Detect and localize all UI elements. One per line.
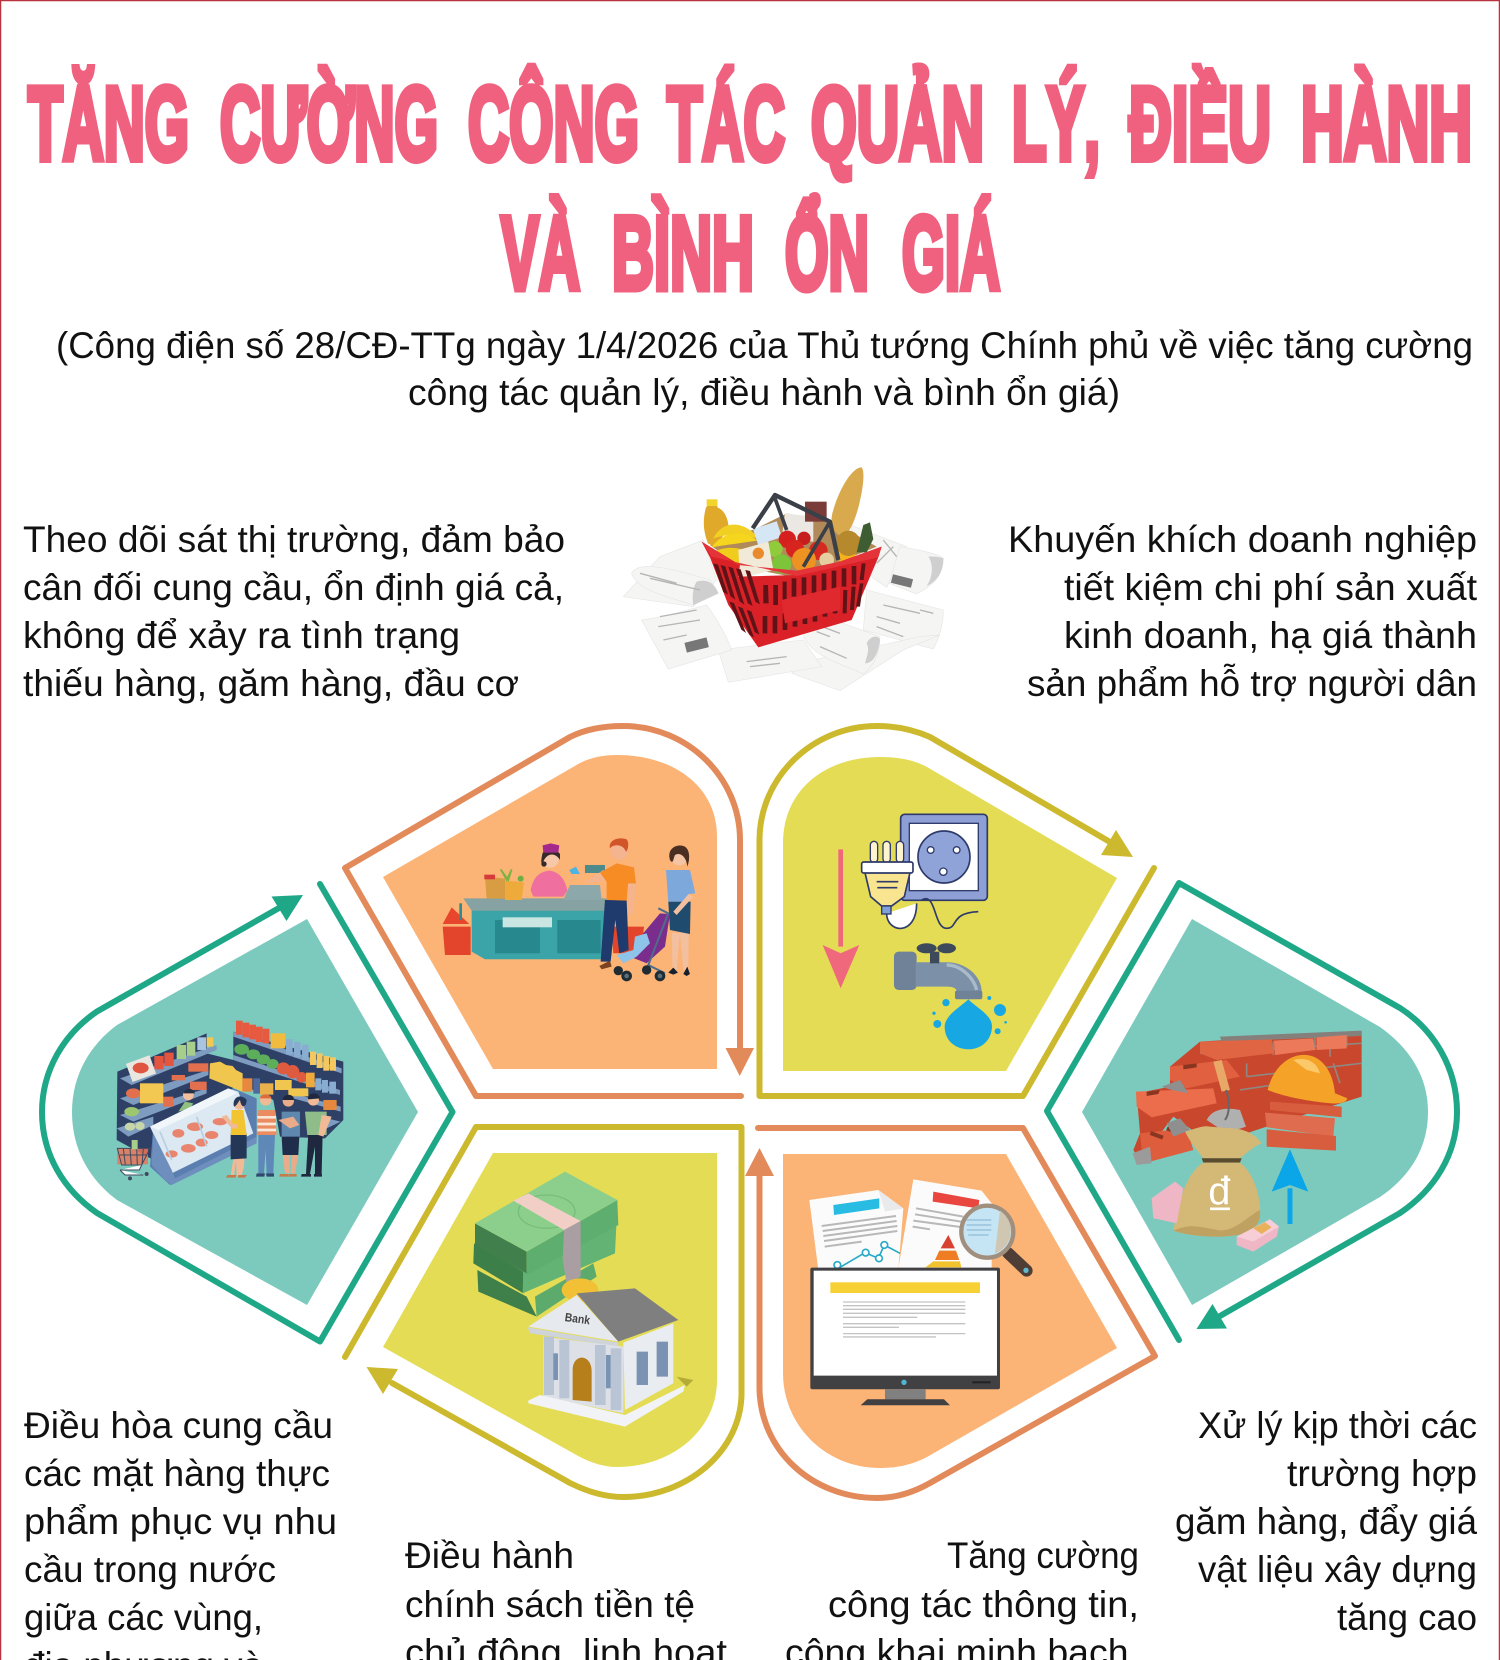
text block: bottom far right: Xử lý kịp thời các bbox=[1198, 1405, 1477, 1446]
text block: bottom far left bbox=[24, 1405, 337, 1660]
text block: bottom far right: vật liệu xây dựng bbox=[1198, 1549, 1477, 1590]
text block: top left: không để xảy ra tình trạng bbox=[23, 615, 460, 656]
arrow: right outline bbox=[1047, 883, 1457, 1340]
title: ĐIỀU bbox=[1129, 66, 1271, 182]
arrow: top-right outline bbox=[760, 726, 1154, 1096]
text block: bottom middle right bbox=[785, 1535, 1139, 1660]
panel: top-left orange bbox=[345, 726, 754, 1096]
shopping cart bbox=[117, 1140, 150, 1180]
text block: top left: thiếu hàng, găm hàng, đầu cơ bbox=[23, 663, 519, 704]
text block: bottom far left: các mặt hàng thực bbox=[24, 1453, 330, 1494]
money bag bbox=[1185, 1126, 1262, 1158]
text block: top right bbox=[1008, 519, 1478, 704]
subtitle: công tác quản lý, điều hành và bình ổn giá) bbox=[408, 372, 1120, 413]
panel: left teal bbox=[42, 884, 452, 1342]
illustration: socket, tap and down arrow bbox=[823, 814, 1007, 1049]
illustration: supermarket bbox=[117, 1021, 343, 1185]
deli counter bbox=[150, 1088, 257, 1185]
text block: top right: sản phẩm hỗ trợ người dân bbox=[1027, 663, 1477, 704]
title: TÁC bbox=[667, 66, 785, 182]
text block: bottom far right: tăng cao bbox=[1337, 1597, 1477, 1638]
panel: top-right yellow bbox=[760, 726, 1154, 1096]
title bbox=[28, 66, 1472, 312]
text block: bottom far left: phẩm phục vụ nhu bbox=[24, 1501, 337, 1542]
text block: top right: kinh doanh, hạ giá thành bbox=[1064, 615, 1477, 656]
text block: bottom middle right: công tác thông tin, bbox=[828, 1584, 1139, 1625]
arrow: left outline bbox=[42, 884, 452, 1342]
subtitle: (Công điện số 28/CĐ-TTg ngày 1/4/2026 của Thủ tướng Chính phủ về việc tăng cường bbox=[56, 325, 1473, 366]
text block: bottom middle left: Điều hành bbox=[405, 1535, 574, 1576]
text block: bottom far left: Điều hòa cung cầu bbox=[24, 1405, 333, 1446]
text block: top left: Theo dõi sát thị trường, đảm bảo bbox=[23, 519, 565, 560]
title: LÝ, bbox=[1012, 66, 1100, 182]
text block: top right: tiết kiệm chi phí sản xuất bbox=[1064, 567, 1478, 608]
text block: bottom far right: trường hợp bbox=[1287, 1453, 1477, 1494]
panel: bottom-right orange bbox=[745, 1128, 1155, 1498]
title: CÔNG bbox=[468, 66, 639, 182]
text block: bottom middle right: Tăng cường bbox=[947, 1535, 1139, 1576]
text block: bottom far right bbox=[1175, 1405, 1477, 1638]
panel: bottom-left yellow bbox=[345, 1127, 742, 1497]
text block: top left: cân đối cung cầu, ổn định giá cả, bbox=[23, 567, 564, 608]
basket body bbox=[702, 542, 882, 647]
panel: right teal bbox=[1047, 883, 1457, 1340]
title: TĂNG bbox=[28, 66, 189, 182]
text block: bottom far left: giữa các vùng, bbox=[24, 1597, 263, 1638]
arrow: bottom-left outline bbox=[345, 1127, 742, 1497]
illustration: money stack and bank: Bank bbox=[564, 1310, 591, 1327]
title: GIÁ bbox=[902, 196, 1000, 312]
arrow: top-left outline bbox=[345, 726, 754, 1096]
subtitle bbox=[56, 325, 1473, 413]
text block: top right: Khuyến khích doanh nghiệp bbox=[1008, 519, 1477, 560]
title: VÀ bbox=[501, 196, 580, 312]
basket contents bbox=[710, 513, 877, 578]
text block: top left bbox=[23, 519, 565, 704]
text block: bottom far right: găm hàng, đẩy giá bbox=[1175, 1501, 1477, 1542]
title: BÌNH bbox=[612, 196, 754, 312]
illustration: checkout counter bbox=[443, 838, 695, 981]
text block: bottom far left: cầu trong nước bbox=[24, 1549, 276, 1590]
title: QUẢN bbox=[811, 66, 984, 182]
illustration: documents, magnifier and monitor bbox=[809, 1179, 1029, 1405]
title: ỔN bbox=[785, 195, 869, 312]
title: CƯỜNG bbox=[220, 66, 438, 182]
helmet and stack bbox=[1270, 1102, 1342, 1117]
illustration: bricks, helmet, money bag and up arrow bbox=[1133, 1031, 1362, 1252]
currency symbol: ₫ bbox=[1205, 1167, 1235, 1230]
text block: bottom middle left bbox=[405, 1535, 728, 1660]
text block: bottom middle left: chính sách tiền tệ bbox=[405, 1584, 695, 1625]
trowel bbox=[1213, 1060, 1230, 1092]
arrow: bottom-right outline bbox=[745, 1128, 1155, 1498]
illustration: money stack and bank bbox=[473, 1172, 693, 1427]
shoppers bbox=[222, 1093, 332, 1178]
illustration: shopping basket with receipts bbox=[623, 467, 943, 691]
